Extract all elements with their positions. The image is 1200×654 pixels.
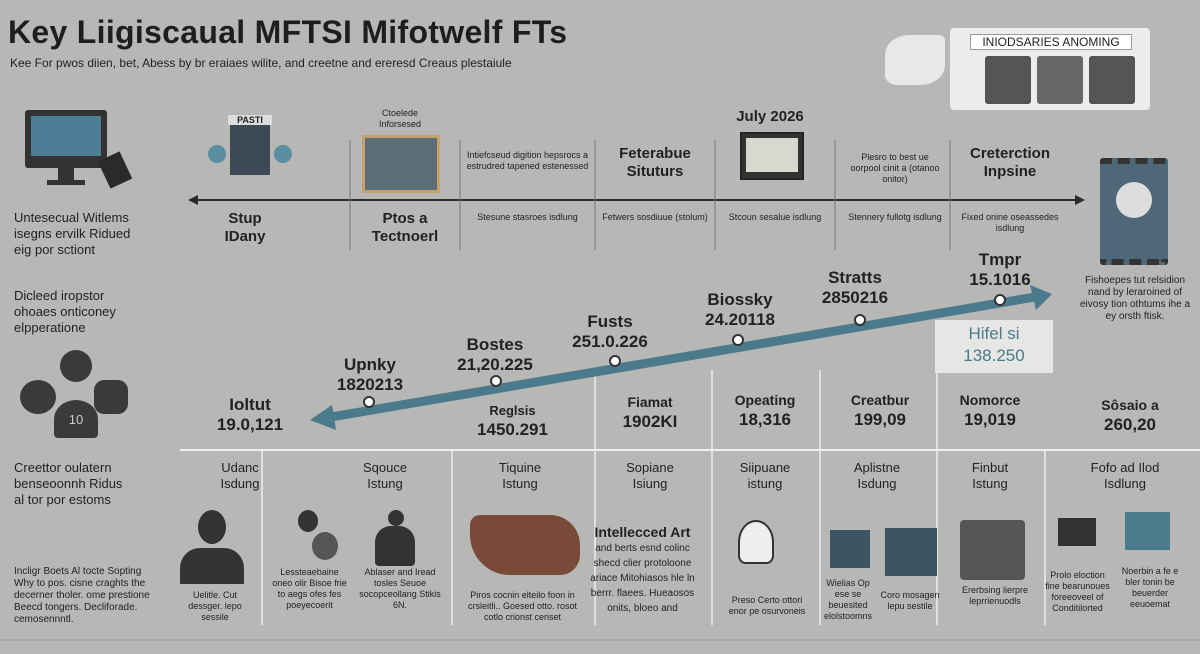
text: Wielias Op ese se beuesited elolstoomns [824, 578, 872, 621]
bottom captions: Uelitle. Cut dessger. lepo sessile [188, 590, 242, 622]
text: Ptos a Tectnoerl [372, 210, 438, 245]
text: Aplistne [854, 460, 900, 475]
text: Fiamat [627, 394, 673, 410]
text: Ctoelede Inforsesed [379, 108, 421, 129]
text: Fishoepes tut relsidion nand by leraroined of eivosy tion othtums ihe a ey orsth ftisk. [1080, 275, 1190, 322]
text: Coro mosagen lepu sestile [880, 590, 940, 611]
text: Incligr Boets Al tocte Sopting Why to pos. cisne craghts the decerner tholer. ome prestione Beecd tongers. Decliforade. cemosennntl. [14, 566, 150, 625]
icon: device right [1100, 158, 1168, 265]
diagonal arrow [325, 297, 1035, 418]
text: Creterction Inpsine [970, 145, 1050, 180]
text: Dicleed iropstor ohoaes onticoney elpperatione [14, 288, 116, 335]
text: istung [748, 476, 782, 491]
text: Fofo ad Ilod [1091, 460, 1159, 475]
icon: gears group: 10 [69, 412, 83, 427]
top milestones: PASTI [237, 115, 263, 125]
text: July 2026 [736, 108, 804, 125]
text: IDany [225, 228, 265, 245]
title: Key Liigiscaual MFTSI Mifotwelf FTs [8, 14, 567, 50]
top milestones [208, 115, 292, 175]
text: Lessteaebaine oneo olir Bisoe frie to aegs ofes fes poeyecoerit [272, 567, 347, 610]
text: Noerbin a fe e bler tonin be beuerder eeuoemat [1122, 566, 1178, 609]
text: Piros cocnin elteilo foon in crsleitli.. Goesed otto. rosot cotlo crionst ceriset [468, 590, 577, 622]
text: 15.1016 [969, 270, 1031, 289]
text: Ablaser and Iread tosles Seuoe socopceollang Stikis 6N. [359, 567, 441, 610]
bottom labels: Isdung [220, 476, 260, 491]
text: Intiefcseud digition hepsrocs a estrudred tapened estenessed [467, 150, 588, 171]
text: Stratts [828, 268, 882, 287]
text: Stup [228, 210, 262, 227]
text: 2850216 [822, 288, 888, 307]
text: Isiung [633, 476, 667, 491]
text: Stesune stasroes isdlung [477, 212, 578, 222]
text: Isdung [857, 476, 897, 491]
panel heading: INIODSARIES ANOMING [982, 35, 1120, 49]
text: Sqouce [363, 460, 407, 475]
text: Tmpr [979, 250, 1021, 269]
text: Feterabue Situturs [619, 145, 691, 180]
left text blocks: Untesecual Witlems isegns ervilk Ridued eig por sctiont [14, 210, 130, 257]
text: 199,09 [854, 410, 906, 429]
text: 19,019 [964, 410, 1016, 429]
text: 24.20118 [705, 310, 775, 329]
text: Bostes [467, 335, 523, 354]
text: 251.0.226 [572, 332, 648, 351]
text: 1902KI [623, 412, 677, 431]
diagonal labels: 1820213 [337, 375, 403, 394]
text: Preso Certo ottori enor pe osurvoneis [729, 595, 805, 616]
text: Creettor oulatern benseoonnh Ridus al tor por estoms [14, 460, 122, 507]
text: 260,20 [1104, 415, 1156, 434]
text: Plesro to best ue oorpool cinit a (otanoo onitor) [850, 152, 940, 184]
diagonal labels: Upnky [344, 355, 396, 374]
text: Nomorce [960, 392, 1020, 408]
text: Sôsaio a [1101, 397, 1159, 413]
text: Siipuane [740, 460, 790, 475]
text: Biossky [707, 290, 773, 309]
callout box: 138.250 [963, 346, 1025, 365]
callout box: Hifel si [968, 324, 1020, 343]
text: Creatbur [851, 392, 909, 408]
text: Reglsis [489, 403, 536, 418]
text: Finbut [972, 460, 1008, 475]
icon: monitor [25, 110, 132, 188]
text: 18,316 [739, 410, 791, 429]
text: Prolo eloction fine bearunoues foreeoveel of Conditilorted [1045, 570, 1110, 613]
text: Sopiane [626, 460, 674, 475]
text: Fixed onine oseassedes isdlung [961, 212, 1059, 233]
bottom icons [180, 510, 244, 584]
text: Istung [367, 476, 403, 491]
text: Opeating [735, 392, 795, 408]
bottom numbers [217, 395, 283, 434]
text: Stennery fullotg isdlung [848, 212, 942, 222]
text block: intellectual art: Intellecced Art [595, 524, 690, 540]
icon squares [985, 56, 1135, 104]
text: Fetwers sosdiuue (stolum) [602, 212, 708, 222]
subtitle: Kee For pwos diien, bet, Abess by br eraiaes wilite, and creetne and ereresd Creaus plestaiule [10, 56, 512, 70]
text block: intellectual art: and berts esnd colinc shecd clier protoloone ariace Mitohiasos hle ln berrr. flaees. Hueaosos onits, bloeo and [590, 543, 695, 614]
bottom numbers: 19.0,121 [217, 415, 283, 434]
text: Fusts [587, 312, 633, 331]
bottom numbers: Ioltut [229, 395, 271, 414]
text: 1450.291 [477, 420, 548, 439]
text: Stcoun sesalue isdlung [729, 212, 821, 222]
bottom labels: Udanc [221, 460, 259, 475]
icon: gears group [20, 350, 128, 438]
text: Tiquine [499, 460, 541, 475]
text: Istung [502, 476, 538, 491]
diagonal labels [337, 355, 403, 394]
top-right panel [950, 28, 1150, 110]
text: Isdlung [1104, 476, 1146, 491]
bottom labels [220, 460, 260, 491]
text: Istung [972, 476, 1008, 491]
icon: map [885, 35, 945, 85]
callout box [935, 320, 1053, 373]
text: Ererbsing lierpre leprrienuodls [962, 585, 1028, 606]
text: 21,20.225 [457, 355, 533, 374]
